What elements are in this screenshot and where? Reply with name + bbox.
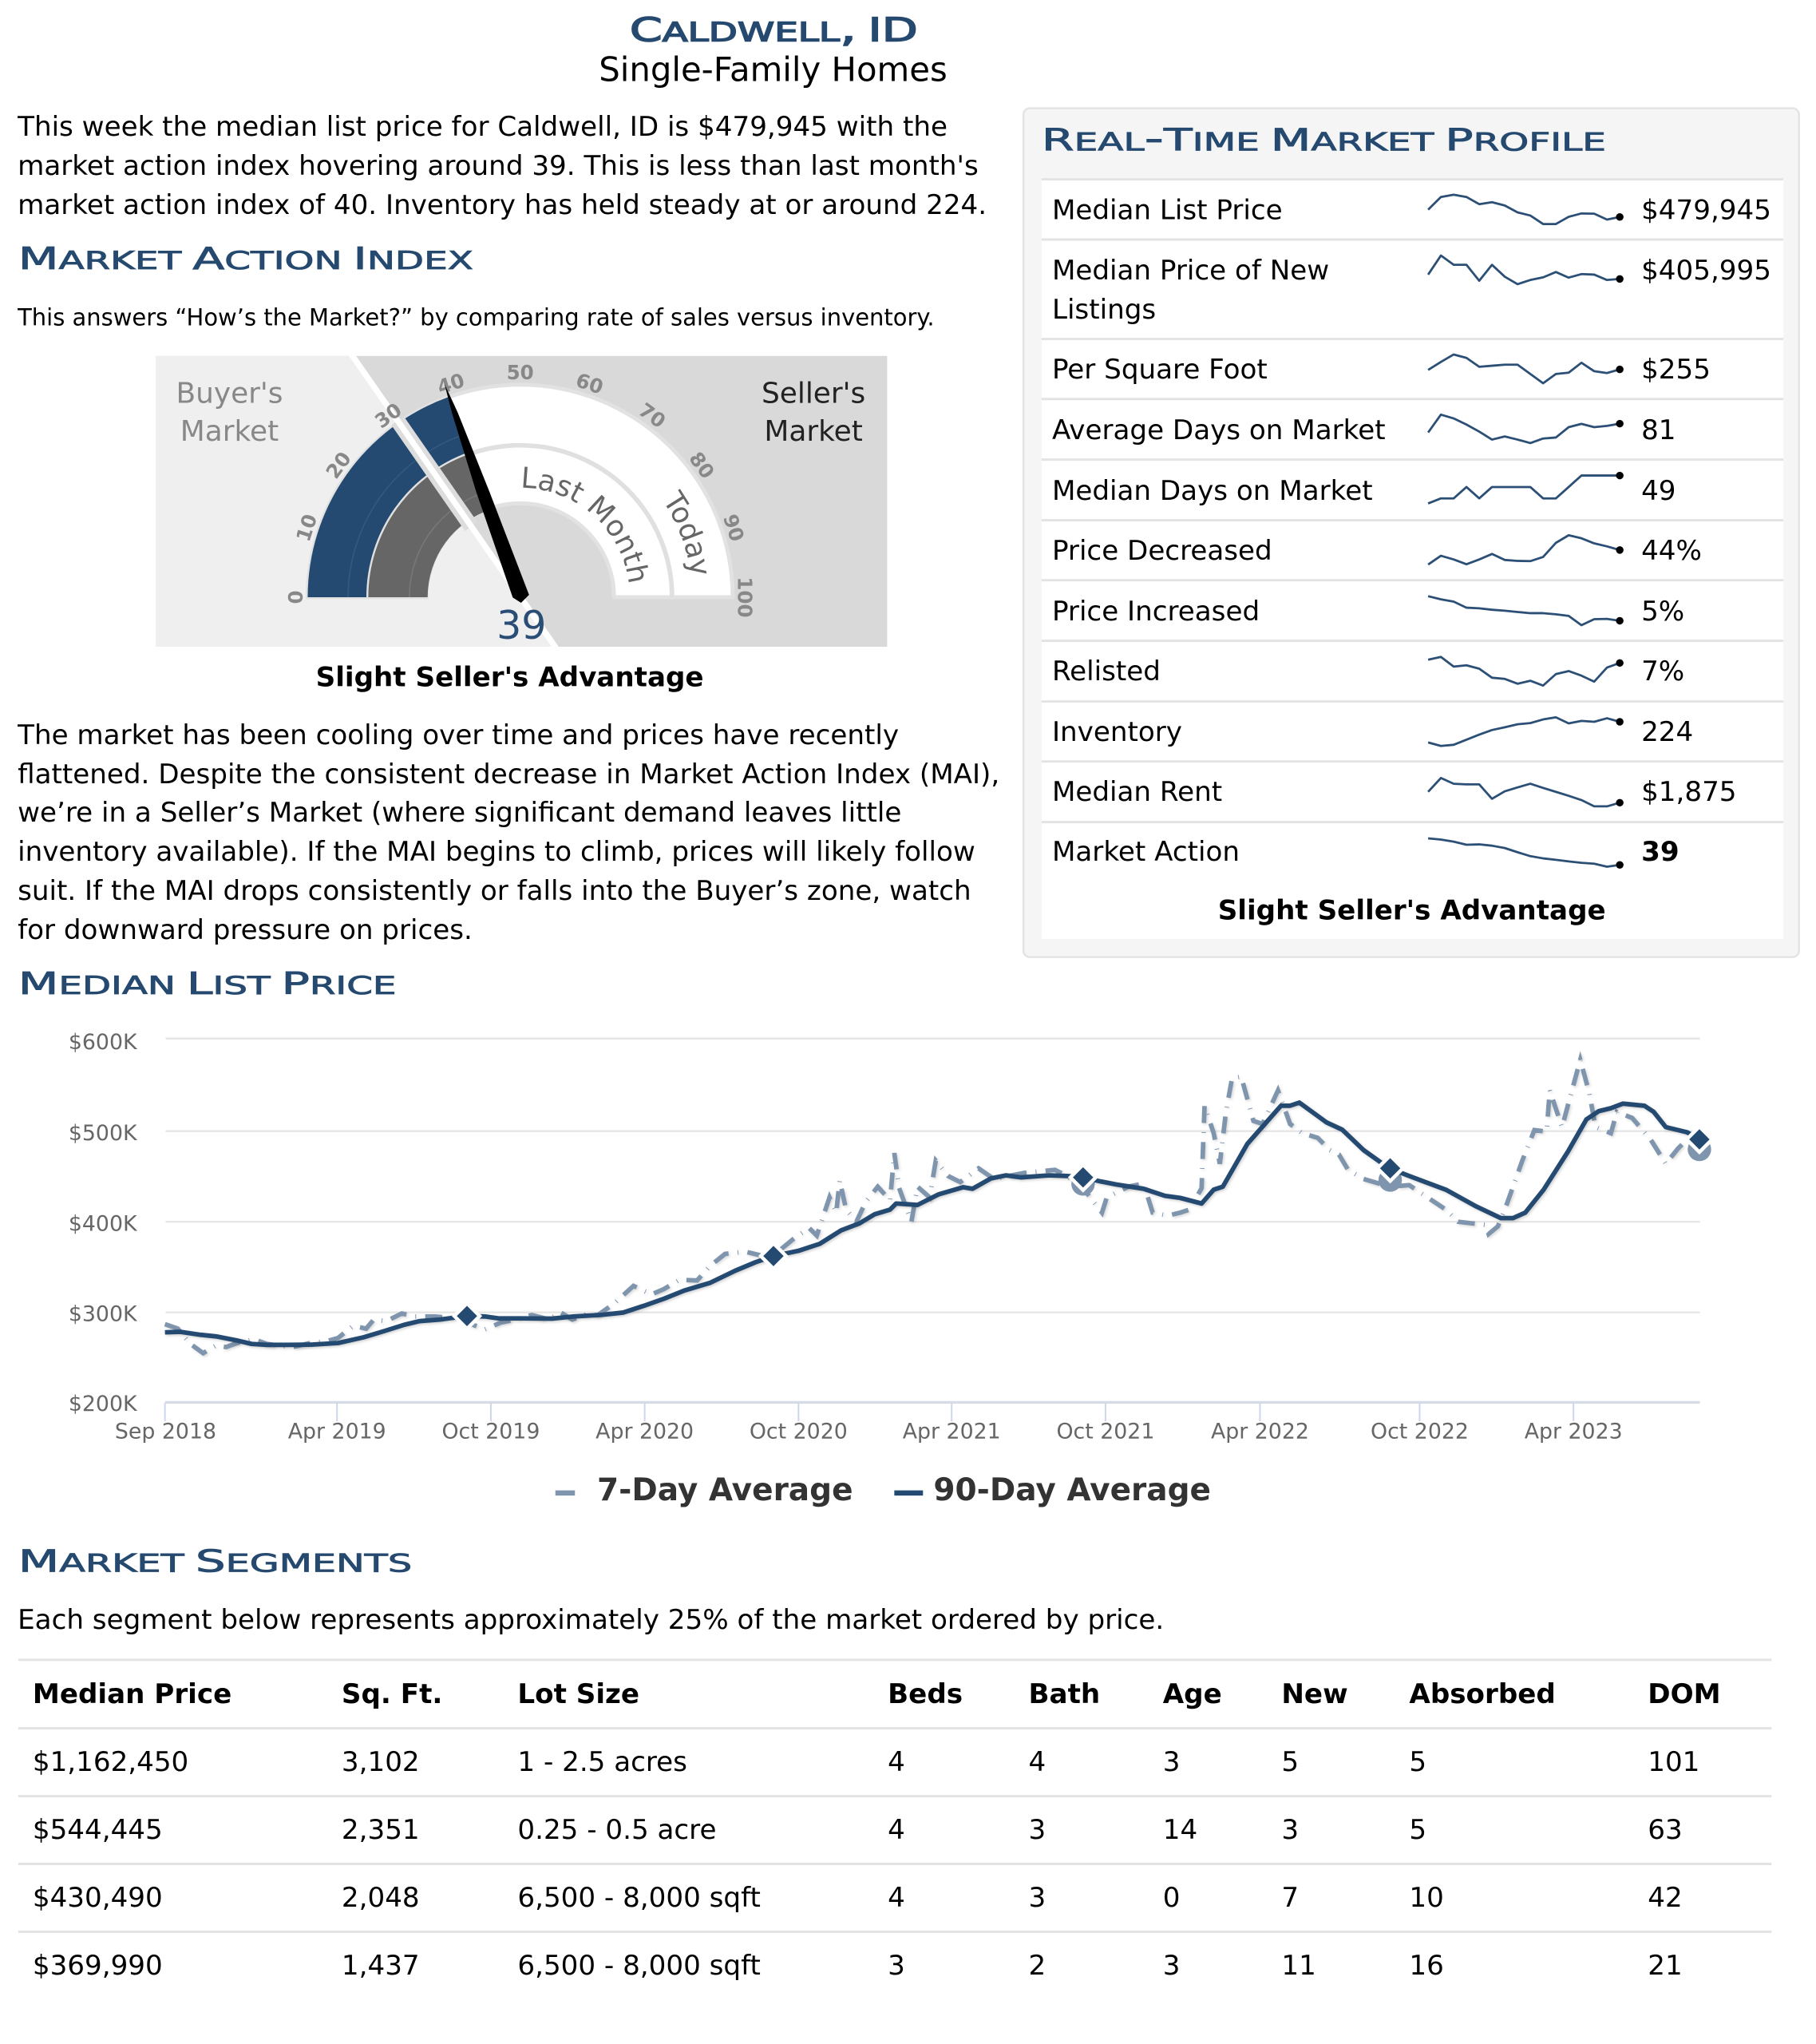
table row 4: 3 xyxy=(1163,1950,1180,1982)
row values xyxy=(1641,195,1771,868)
table row 4: 16 xyxy=(1409,1950,1444,1982)
row labels: Median Rent xyxy=(1052,776,1222,808)
table row 4: 2 xyxy=(1029,1950,1046,1982)
gauge needle xyxy=(445,384,529,603)
panel caption: Slight Seller's Advantage xyxy=(1218,895,1606,927)
y axis labels: $600K xyxy=(69,1030,138,1055)
table row 4: 21 xyxy=(1648,1950,1683,1982)
table row 1: 4 xyxy=(888,1746,905,1778)
row labels xyxy=(1052,195,1386,868)
market commentary paragraph: we’re in a Seller’s Market (where significant demand leaves little xyxy=(18,797,901,829)
table row 1: 5 xyxy=(1281,1746,1299,1778)
table row 4: 3 xyxy=(888,1950,905,1982)
gauge: market action index xyxy=(156,356,888,648)
gauge scale labels: 40 xyxy=(434,368,467,399)
table row 2: $544,445 xyxy=(33,1814,163,1846)
gauge scale labels: 20 xyxy=(321,447,356,483)
x axis labels: Sep 2018 xyxy=(115,1419,216,1444)
last month band value xyxy=(368,453,492,597)
table header: Sq. Ft. xyxy=(342,1678,442,1710)
table row 1: 1 - 2.5 acres xyxy=(517,1746,687,1778)
y axis labels xyxy=(69,1030,138,1416)
title: Single-Family Homes xyxy=(599,50,948,89)
gauge scale labels: 50 xyxy=(507,361,534,384)
chart legend xyxy=(556,1472,1211,1508)
table: market segments xyxy=(18,1660,1771,1982)
gauge scale labels: 80 xyxy=(684,447,719,483)
intro paragraph xyxy=(17,111,987,221)
market commentary paragraph: The market has been cooling over time and prices have recently xyxy=(17,719,899,751)
table row 2: 63 xyxy=(1648,1814,1683,1846)
today band value xyxy=(307,397,468,597)
table row 3: 10 xyxy=(1409,1882,1444,1914)
x axis labels: Apr 2020 xyxy=(595,1419,694,1444)
intro paragraph: market action index hovering around 39. This is less than last month's xyxy=(18,150,979,182)
row values: 39 xyxy=(1641,836,1680,868)
table row 3: $430,490 xyxy=(33,1882,163,1914)
heading: median list price: M edian L ist P rice xyxy=(18,962,397,1003)
table row 3: 4 xyxy=(888,1882,905,1914)
market commentary paragraph: inventory available). If the MAI begins to climb, prices will likely follow xyxy=(18,836,975,868)
table row 2 xyxy=(33,1814,1683,1846)
x axis labels xyxy=(115,1419,1623,1444)
row values: 49 xyxy=(1641,475,1676,507)
sparklines xyxy=(1428,195,1624,869)
table row 2: 4 xyxy=(888,1814,905,1846)
row labels: Relisted xyxy=(1052,656,1161,687)
market commentary paragraph: for downward pressure on prices. xyxy=(18,914,473,946)
7-day average line xyxy=(165,1060,1699,1353)
table row 1 xyxy=(33,1746,1699,1778)
table row 1: 3 xyxy=(1163,1746,1180,1778)
7-day markers xyxy=(1071,1138,1711,1196)
market action subtitle: This answers “How’s the Market?” by comparing rate of sales versus inventory. xyxy=(17,303,935,331)
y axis labels: $300K xyxy=(69,1301,138,1326)
table row 1: 5 xyxy=(1409,1746,1426,1778)
row labels: Median Days on Market xyxy=(1052,475,1373,507)
y axis labels: $500K xyxy=(69,1121,138,1146)
table row 2: 14 xyxy=(1163,1814,1197,1846)
table row 2: 3 xyxy=(1281,1814,1299,1846)
gauge scale labels: 70 xyxy=(635,398,670,433)
gauge scale labels: 0 xyxy=(284,590,307,604)
row labels: Median Price of New xyxy=(1052,255,1329,287)
row labels: Per Square Foot xyxy=(1052,354,1268,386)
row values: $405,995 xyxy=(1641,255,1771,287)
table row 2: 3 xyxy=(1029,1814,1046,1846)
table row 4 xyxy=(33,1950,1683,1982)
table row 3: 7 xyxy=(1281,1882,1299,1914)
table header: DOM xyxy=(1648,1678,1721,1710)
row values: 5% xyxy=(1641,596,1684,628)
market commentary paragraph: suit. If the MAI drops consistently or falls into the Buyer’s zone, watch xyxy=(18,875,971,907)
row labels: Price Increased xyxy=(1052,596,1260,628)
table row 3: 3 xyxy=(1029,1882,1046,1914)
table row 1: 3,102 xyxy=(342,1746,420,1778)
gauge scale labels: 100 xyxy=(733,576,756,618)
x axis labels: Apr 2021 xyxy=(903,1419,1001,1444)
table header xyxy=(33,1678,1721,1710)
table row 3: 2,048 xyxy=(342,1882,420,1914)
intro paragraph: market action index of 40. Inventory has held steady at or around 224. xyxy=(18,189,987,221)
heading: market segments: M arket S egments xyxy=(18,1540,412,1581)
table row 2: 2,351 xyxy=(342,1814,420,1846)
table row 3: 42 xyxy=(1648,1882,1683,1914)
gauge scale labels: 10 xyxy=(291,511,322,545)
panel heading: R eal- T ime M arket P rofile xyxy=(1042,118,1606,159)
table row 3: 0 xyxy=(1163,1882,1180,1914)
table header: Beds xyxy=(888,1678,963,1710)
y axis labels: $400K xyxy=(69,1212,138,1237)
row values: $255 xyxy=(1641,354,1711,386)
x axis labels: Oct 2022 xyxy=(1371,1419,1469,1444)
table row 2: 5 xyxy=(1409,1814,1426,1846)
y axis labels: $200K xyxy=(69,1392,138,1416)
90-day diamond markers xyxy=(457,1129,1710,1326)
chart legend: 90-Day Average xyxy=(933,1472,1211,1508)
line chart: median list price xyxy=(69,1030,1711,1444)
table row 4: 11 xyxy=(1281,1950,1316,1982)
gauge caption: Slight Seller's Advantage xyxy=(316,661,704,693)
panel: real-time market profile xyxy=(1023,109,1799,957)
seller's market label: Seller's xyxy=(762,378,865,410)
gauge scale labels: 30 xyxy=(370,398,406,433)
x axis labels: Apr 2023 xyxy=(1525,1419,1623,1444)
table header: Bath xyxy=(1029,1678,1100,1710)
seller's market label: Market xyxy=(764,415,863,448)
x axis labels: Apr 2019 xyxy=(288,1419,386,1444)
segments intro: Each segment below represents approximately 25% of the market ordered by price. xyxy=(18,1604,1164,1636)
table row 1: 4 xyxy=(1029,1746,1046,1778)
gauge value: 39 xyxy=(497,603,546,648)
buyer's market label: Market xyxy=(180,415,279,448)
title xyxy=(599,6,948,89)
table row 3 xyxy=(33,1882,1683,1914)
table row 1: 101 xyxy=(1648,1746,1699,1778)
title: C aldwell, ID xyxy=(630,6,918,50)
row labels: Median List Price xyxy=(1052,195,1283,227)
x axis labels: Oct 2021 xyxy=(1056,1419,1154,1444)
table header: New xyxy=(1281,1678,1348,1710)
x axis labels: Apr 2022 xyxy=(1211,1419,1309,1444)
market commentary paragraph: flattened. Despite the consistent decrease in Market Action Index (MAI), xyxy=(18,759,999,790)
table row 1: $1,162,450 xyxy=(33,1746,188,1778)
table row 2: 0.25 - 0.5 acre xyxy=(517,1814,716,1846)
row labels: Market Action xyxy=(1052,836,1240,868)
chart legend: 7-Day Average xyxy=(597,1472,853,1508)
table header: Lot Size xyxy=(517,1678,639,1710)
x axis labels: Oct 2019 xyxy=(441,1419,540,1444)
gauge scale labels: 60 xyxy=(573,368,606,399)
gauge scale labels: 90 xyxy=(718,511,749,545)
table header: Median Price xyxy=(33,1678,231,1710)
row labels: Price Decreased xyxy=(1052,535,1272,567)
market commentary paragraph xyxy=(17,719,999,946)
buyer's market label: Buyer's xyxy=(176,378,283,410)
table row 4: $369,990 xyxy=(33,1950,163,1982)
gauge scale labels xyxy=(284,361,756,618)
intro paragraph: This week the median list price for Caldwell, ID is $479,945 with the xyxy=(17,111,948,143)
row values: 224 xyxy=(1641,716,1693,748)
row values: 44% xyxy=(1641,535,1702,567)
today arc label: Today xyxy=(666,489,707,573)
x axis labels: Oct 2020 xyxy=(750,1419,848,1444)
row values: $1,875 xyxy=(1641,776,1737,808)
row values: 7% xyxy=(1641,656,1684,687)
table row 4: 1,437 xyxy=(342,1950,420,1982)
row values: $479,945 xyxy=(1641,195,1771,227)
table header: Age xyxy=(1163,1678,1222,1710)
row labels: Average Days on Market xyxy=(1052,414,1386,446)
row labels: Inventory xyxy=(1052,716,1182,748)
table row 4: 6,500 - 8,000 sqft xyxy=(517,1950,761,1982)
table header: Absorbed xyxy=(1409,1678,1556,1710)
table row 3: 6,500 - 8,000 sqft xyxy=(517,1882,761,1914)
90-day average line xyxy=(165,1103,1699,1345)
heading: market action index: M arket A ction Index xyxy=(18,237,473,278)
row values: 81 xyxy=(1641,414,1676,446)
last month arc label: Last Month xyxy=(523,466,648,583)
row labels: Listings xyxy=(1052,294,1156,326)
